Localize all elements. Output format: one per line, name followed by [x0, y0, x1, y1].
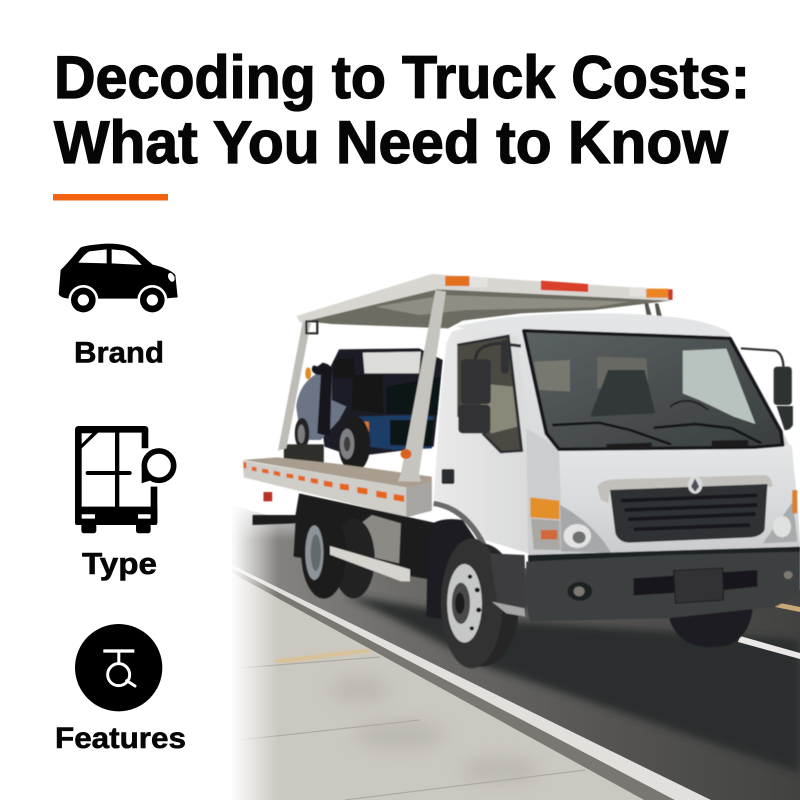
- fender and step panel: [490, 553, 526, 615]
- canopy lights: [445, 276, 673, 300]
- tan marking right: [775, 602, 800, 612]
- flatbed deck top: [243, 457, 432, 487]
- front wheel: [441, 538, 519, 668]
- white road edge line: [230, 564, 711, 800]
- orange accent bar: [53, 194, 168, 200]
- under-bed frame and step: [253, 485, 437, 580]
- fuel tank: [361, 515, 401, 563]
- rear rack posts: [645, 303, 662, 317]
- side guard rail: [330, 546, 410, 582]
- front right wheel: [668, 607, 753, 647]
- rear wheels: [301, 508, 375, 599]
- cab front panel: [455, 313, 800, 555]
- asphalt road: [232, 505, 800, 800]
- right headlight: [763, 502, 797, 543]
- canopy left post: [278, 321, 311, 451]
- canopy top rail: [297, 274, 672, 323]
- cab side edge shading: [526, 428, 563, 553]
- pavement: [232, 573, 644, 800]
- tow truck photo illustration: [243, 274, 800, 668]
- road and pavement scene: [228, 495, 800, 800]
- towed car: [284, 348, 443, 472]
- label: Type: Type: [82, 546, 157, 581]
- title: [54, 44, 750, 176]
- pavement blotches: [330, 678, 540, 782]
- left image fade: [228, 495, 278, 800]
- windshield: [524, 331, 783, 449]
- icon: truck body type: [75, 429, 174, 533]
- orange side markers: [243, 462, 404, 502]
- icon: features magnifier badge: [75, 624, 162, 711]
- canopy underside: [301, 288, 670, 328]
- right wing mirror: [741, 348, 793, 430]
- wipers: [554, 423, 670, 444]
- front bumper: [525, 547, 800, 622]
- pavement joints: [240, 657, 585, 800]
- towed rack right post: [398, 290, 446, 482]
- top image fade: [228, 495, 338, 540]
- flatbed side: [243, 461, 432, 517]
- left wing mirror: [458, 340, 521, 433]
- road shadow below truck: [345, 595, 800, 773]
- label: Brand: Brand: [74, 336, 164, 370]
- front wheel arch: [426, 519, 514, 620]
- side window: [457, 336, 522, 452]
- title: What You Need to Know: [54, 109, 728, 176]
- icon: car: [59, 244, 178, 315]
- grille: [597, 475, 773, 543]
- canopy inner strips: [375, 295, 630, 315]
- title: Decoding to Truck Costs:: [54, 44, 750, 111]
- cab side panel: [434, 317, 563, 553]
- lane marking right: [738, 636, 800, 659]
- gutter strip: [232, 567, 675, 800]
- label: Features: Features: [55, 722, 186, 755]
- yellow pavement stain: [275, 650, 370, 662]
- left headlight: [530, 497, 611, 553]
- door handle: [442, 469, 454, 484]
